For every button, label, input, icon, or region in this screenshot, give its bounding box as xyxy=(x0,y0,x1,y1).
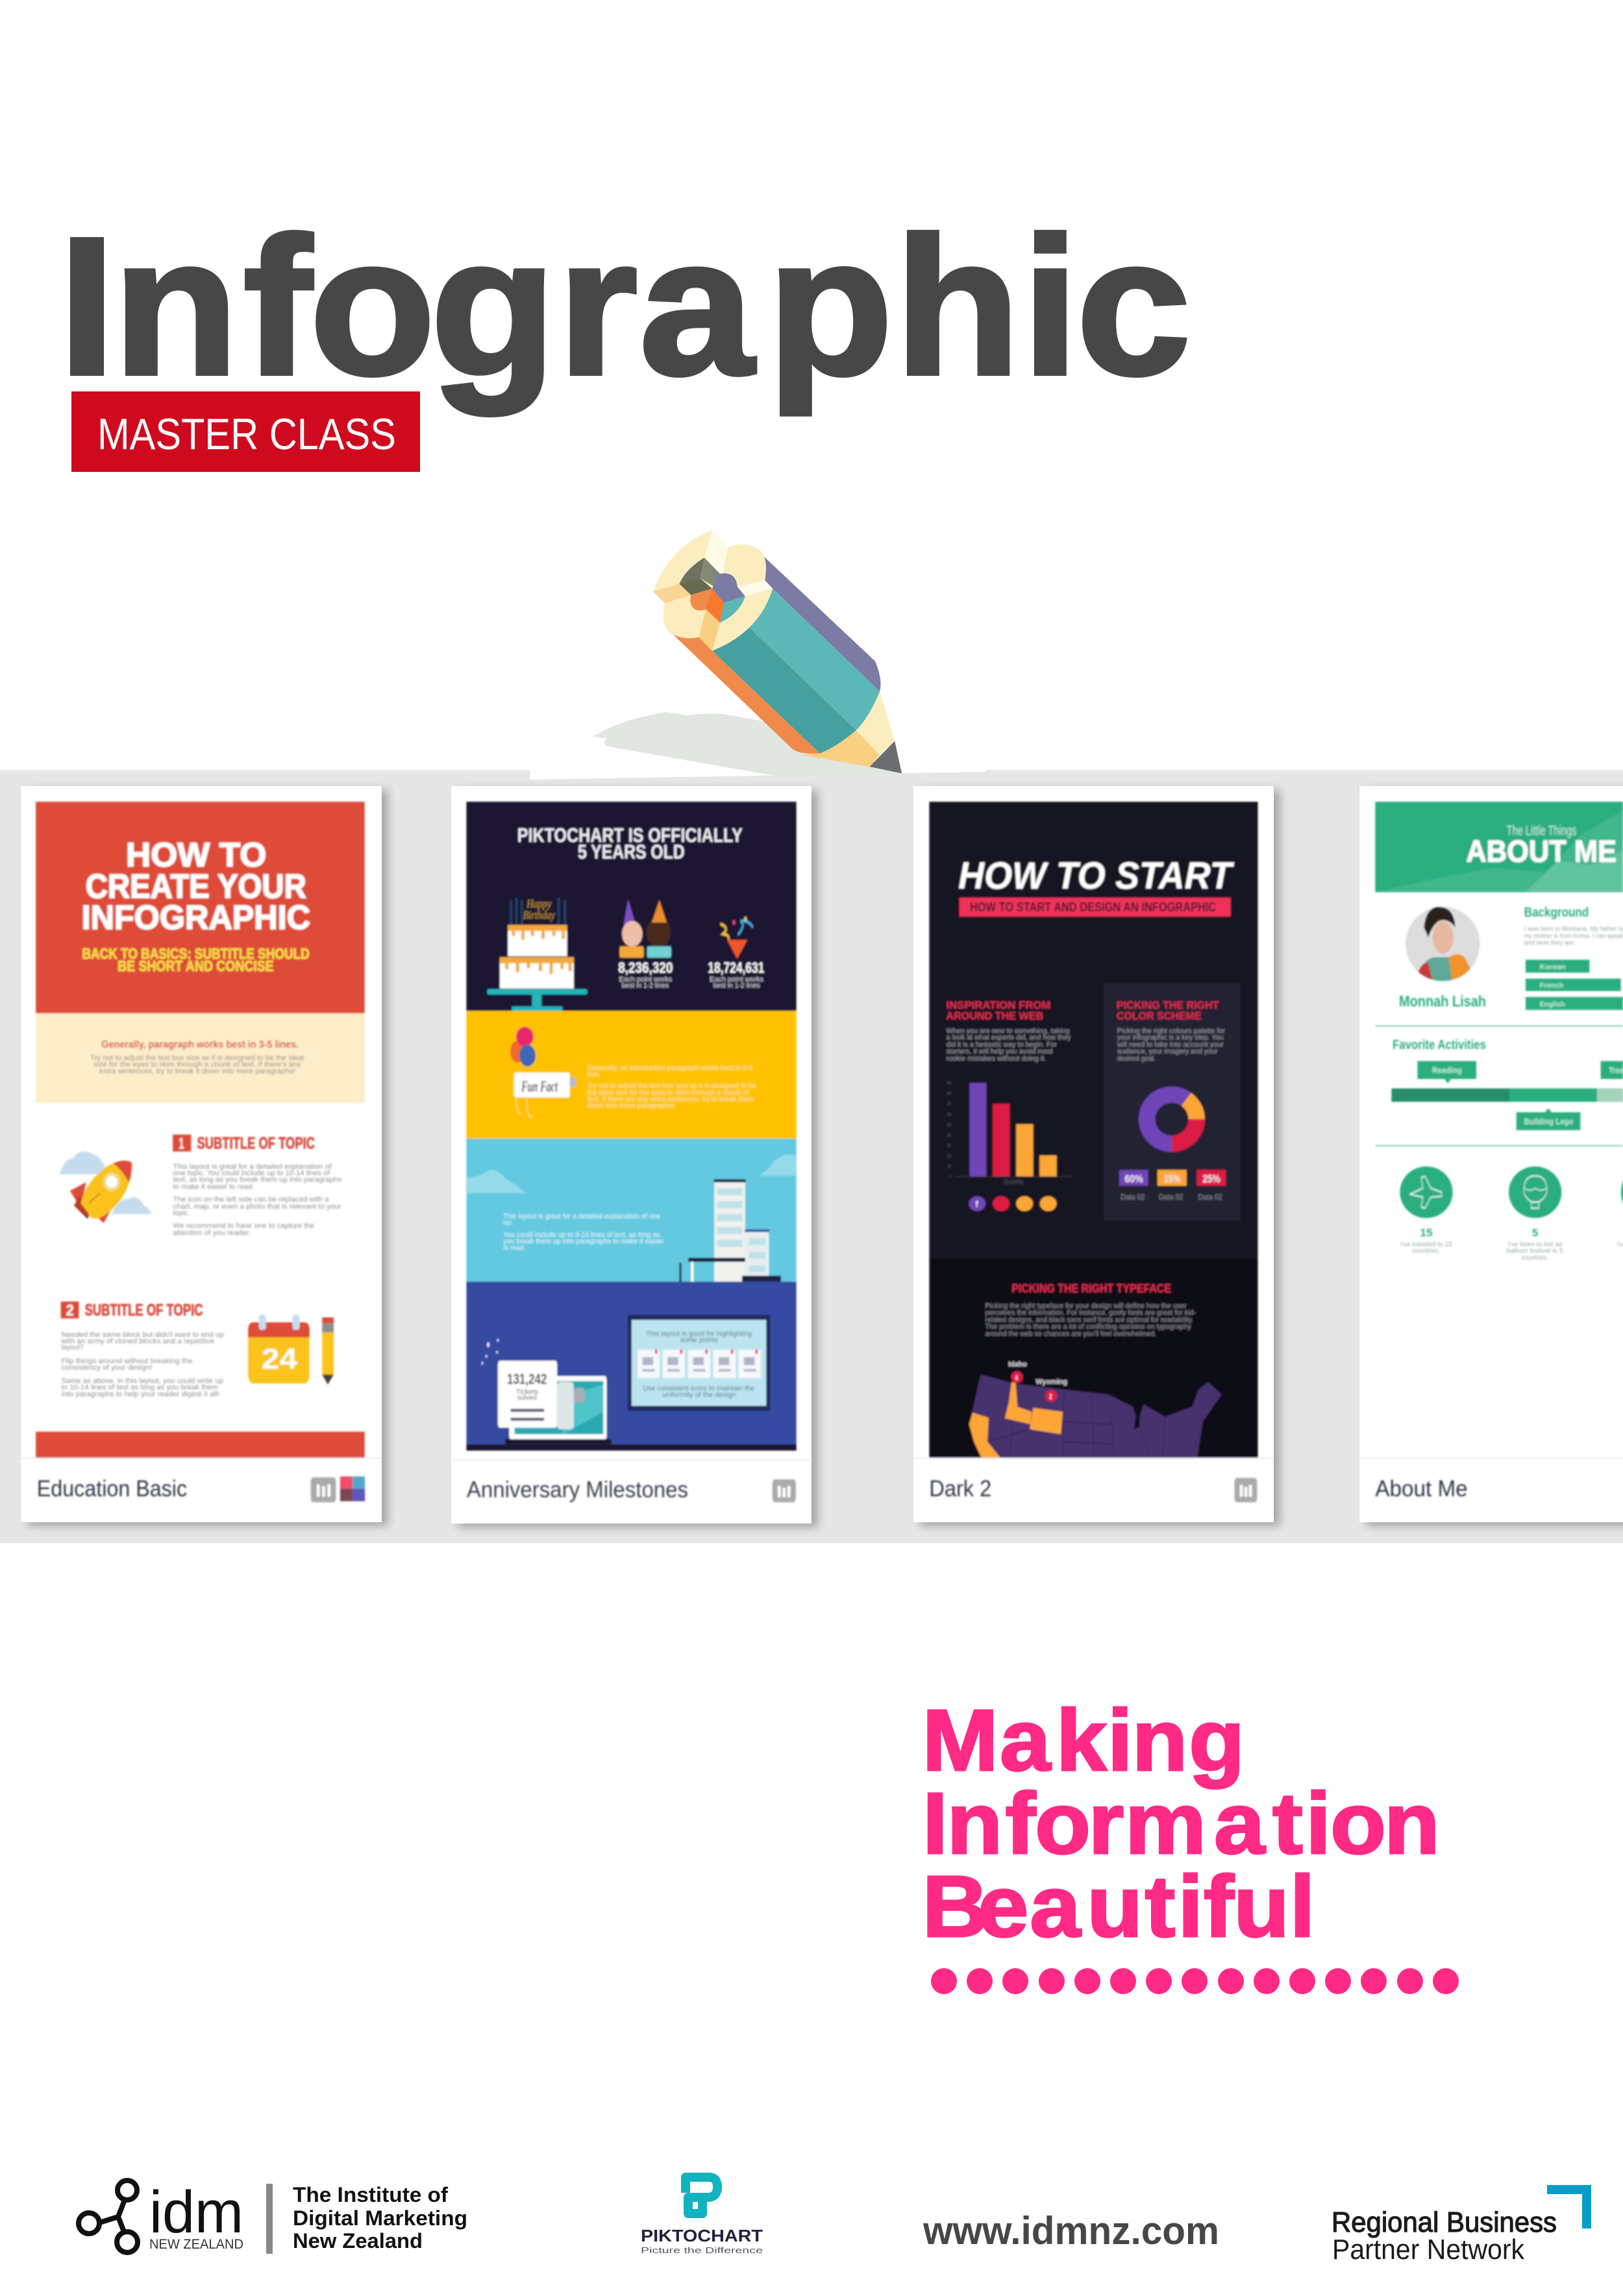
topic 1: The icon on the left side can be replaced with a xyxy=(173,1195,330,1204)
icon: chart badge xyxy=(311,1477,336,1502)
card shadows xyxy=(27,790,1623,1527)
background block: Background xyxy=(1524,906,1589,920)
icon: chart badge xyxy=(773,1479,796,1502)
topic 1: We recommend to have one to capture the xyxy=(173,1222,314,1229)
US map xyxy=(969,1375,1222,1459)
stat: party popper xyxy=(708,917,764,989)
bar chart: 200 xyxy=(947,1154,951,1159)
icon: birthday cake xyxy=(487,898,588,1011)
green header xyxy=(1375,802,1623,892)
panel: colour scheme: Data 02 xyxy=(1159,1193,1183,1202)
icon: idm nodes xyxy=(79,2180,138,2253)
topic 2: layout? xyxy=(62,1343,84,1352)
stat: people: Each point works xyxy=(619,975,673,983)
section: typeface: related designs, and black sans serif fonts are optimal for readability. xyxy=(985,1315,1193,1324)
favorite activities xyxy=(1391,1038,1623,1130)
column: inspiration: When you are new to something, taking xyxy=(947,1027,1069,1035)
panel: colour scheme xyxy=(1104,983,1241,1220)
footer divider xyxy=(1359,1457,1623,1459)
section: blue with highlights: solved xyxy=(517,1394,537,1401)
pencil illustration xyxy=(593,530,902,776)
stat: people: best in 1-2 lines xyxy=(622,981,669,989)
column: inspiration: did it is a fantastic way to begin. For xyxy=(947,1040,1057,1048)
stat: countries travelled: 15 xyxy=(1420,1226,1433,1239)
topic 2: Needed the same block but didn't want to end up xyxy=(62,1330,224,1339)
dotted line xyxy=(931,1968,1459,1994)
logo: Regional Business Partner Network xyxy=(1332,2185,1591,2265)
section: yellow fun fact: Generally, an introduction paragraph works best in 3-5 xyxy=(588,1063,753,1072)
section: navy header xyxy=(466,802,797,1011)
panel: colour scheme: 60% xyxy=(1124,1172,1143,1185)
column: inspiration: rookie mistakes without doing it. xyxy=(947,1054,1046,1062)
section: blue with highlights: 131,242 xyxy=(507,1371,547,1387)
template gallery band xyxy=(0,766,1623,1543)
map pins xyxy=(1008,1360,1067,1402)
cream intro paragraph: size for the eyes to skim through a chunk of text. If there's any xyxy=(93,1060,301,1068)
header block: BACK TO BASICS: SUBTITLE SHOULD xyxy=(82,945,310,962)
bar chart: Quantity xyxy=(1004,1178,1024,1185)
template name: Dark 2 xyxy=(929,1475,991,1501)
bar chart: 300 xyxy=(947,1144,951,1148)
section: sky with building: to read. xyxy=(503,1243,525,1252)
icon: colour swatch xyxy=(340,1476,365,1501)
topic 1 xyxy=(173,1135,342,1237)
column: inspiration xyxy=(947,999,1071,1062)
topic 2: with an army of cloned blocks and a repetitive xyxy=(60,1337,214,1345)
donut chart xyxy=(1139,1087,1205,1152)
stat: cut off at page edge: I've xyxy=(1617,1241,1623,1248)
cream intro paragraph: Try not to adjust the text box size as it is designed to be the ideal xyxy=(90,1054,304,1062)
topic 2: into paragraphs to help your reader digest it all! xyxy=(62,1390,219,1398)
section: sky with building: This layout is great for a detailed explanation of one xyxy=(503,1212,661,1220)
stat: countries travelled xyxy=(1400,1167,1453,1255)
topic 1: text, as long as you break them up into paragraphs xyxy=(173,1176,342,1183)
favorite activities: Reading xyxy=(1432,1067,1462,1076)
tagline: making information beautiful xyxy=(923,1692,1440,1955)
section: blue with highlights: Tickets xyxy=(516,1387,539,1396)
topic 2: SUBTITLE OF TOPIC xyxy=(85,1302,203,1320)
card: Anniversary Milestones xyxy=(451,786,812,1524)
header block: BE SHORT AND CONCISE xyxy=(118,957,274,974)
section: navy header: 5 YEARS OLD xyxy=(578,841,685,863)
panel: colour scheme: your infographic is a key step. You xyxy=(1117,1033,1223,1041)
favorite activities: Trav xyxy=(1609,1067,1623,1076)
template name: Anniversary Milestones xyxy=(467,1476,688,1502)
panel: colour scheme: COLOR SCHEME xyxy=(1117,1009,1202,1022)
bar chart: 900 xyxy=(947,1081,951,1086)
section: sky with building: topic. xyxy=(503,1218,514,1227)
logo: Piktochart: Picture the Difference xyxy=(641,2245,763,2255)
logo: idm New Zealand: The Institute of xyxy=(293,2183,448,2206)
section: blue with highlights: Use consistent icons to maintain the xyxy=(643,1384,754,1392)
icon: rocket xyxy=(60,1152,151,1223)
panel: colour scheme: desired goal. xyxy=(1117,1054,1156,1062)
header block: CREATE YOUR xyxy=(86,867,306,905)
topic 2 xyxy=(60,1302,224,1398)
profile name: Monnah Lisah xyxy=(1399,993,1486,1011)
portrait xyxy=(1406,907,1480,981)
column: inspiration: starters, it will help you avoid most xyxy=(947,1047,1053,1055)
green header: ABOUT ME xyxy=(1466,834,1617,869)
icon: birthday cake: Happy xyxy=(526,898,552,911)
section: typeface: Picking the right typeface for your design will define how the user xyxy=(985,1302,1187,1309)
bar chart: 600 xyxy=(947,1113,951,1117)
header block xyxy=(36,802,365,1013)
stat: party popper: 18,724,631 xyxy=(708,959,764,976)
header block: HOW TO xyxy=(126,835,266,874)
tagline: making information beautiful: Making xyxy=(923,1692,1245,1789)
logo: Regional Business Partner Network: Regional Business xyxy=(1332,2206,1557,2238)
section: yellow fun fact: down into more paragraphs! xyxy=(588,1102,675,1109)
topic 1: This layout is great for a detailed explanation of xyxy=(173,1163,332,1170)
footer divider xyxy=(451,1459,812,1461)
section: typeface: PICKING THE RIGHT TYPEFACE xyxy=(1011,1283,1171,1296)
logo: Piktochart: PIKTOCHART xyxy=(641,2226,763,2245)
section: navy header: PIKTOCHART IS OFFICIALLY xyxy=(517,825,743,847)
bar chart: 100 xyxy=(947,1165,951,1170)
icon: corner bracket xyxy=(1547,2185,1591,2228)
footer accent bar xyxy=(36,1432,365,1458)
topic 1: one topic. You could include up to 10-14 lines of xyxy=(173,1169,330,1177)
section: blue with highlights xyxy=(466,1281,797,1451)
map pins: 2 xyxy=(1050,1392,1052,1400)
stat: hot air balloon festivals: 5 xyxy=(1532,1226,1538,1239)
stat: people: 8,236,320 xyxy=(618,959,673,976)
card: Dark 2 xyxy=(913,786,1274,1522)
template name: Education Basic xyxy=(37,1475,187,1501)
section: yellow fun fact: Try not to adjust the text box size as it is designed to be xyxy=(588,1081,756,1089)
logo: Regional Business Partner Network: Partner Network xyxy=(1332,2234,1525,2265)
background block: English xyxy=(1540,1000,1565,1008)
card: Education Basic xyxy=(21,786,382,1522)
icon: Piktochart mark xyxy=(686,2177,717,2214)
tagline: making information beautiful: Information xyxy=(923,1775,1440,1872)
panel: colour scheme: will need to take into account your xyxy=(1117,1040,1224,1048)
logo: idm New Zealand: Digital Marketing xyxy=(293,2206,467,2230)
section: sky with building: You could include up to 8-10 lines of text, as long as xyxy=(503,1231,660,1239)
map pins: Idaho xyxy=(1008,1360,1027,1368)
stat: people xyxy=(618,899,673,989)
section: typeface: perceives the information. For instance, goofy fonts are great for kid- xyxy=(985,1309,1196,1316)
section: yellow fun fact: text. If there are any extra sentences, try to break them xyxy=(588,1095,754,1103)
topic 1: topic. xyxy=(173,1209,190,1216)
panel: colour scheme: 25% xyxy=(1203,1172,1220,1185)
panel: colour scheme: Data 02 xyxy=(1198,1193,1222,1202)
bar chart xyxy=(947,1081,1072,1185)
section: yellow fun fact: the ideal size for the eyes to skim through a chunk of xyxy=(588,1089,749,1096)
favorite activities: Building Lego xyxy=(1524,1117,1573,1127)
background block: my mother is from Korea. I can speak xyxy=(1524,932,1623,939)
footer divider xyxy=(913,1457,1274,1459)
stat: countries travelled: I've traveled to 15 xyxy=(1400,1241,1452,1248)
subtitle badge: master class: MASTER CLASS xyxy=(97,410,396,459)
green header: The Little Things xyxy=(1507,822,1576,839)
bar chart: 400 xyxy=(947,1133,951,1138)
stat: hot air balloon festivals xyxy=(1507,1167,1563,1261)
panel: colour scheme: audience, your imagery and your xyxy=(1117,1047,1217,1055)
topic 2: Flip things around without breaking the xyxy=(62,1357,192,1364)
bar chart: 700 xyxy=(947,1102,951,1107)
background block: I was born in Montana. My father is xyxy=(1524,925,1623,933)
map pins: 4 xyxy=(1015,1374,1018,1381)
stat: cut off at page edge xyxy=(1617,1167,1623,1248)
topic 2: to 10-14 lines of text as long as you break them xyxy=(62,1383,218,1391)
section: blue with highlights: some points xyxy=(680,1336,718,1344)
icon: birthday cake: Birthday xyxy=(523,909,555,922)
stat: party popper: best in 1-2 lines xyxy=(713,981,760,989)
poster title xyxy=(958,855,1234,917)
bar chart: 800 xyxy=(947,1092,951,1096)
social icons xyxy=(969,1196,1056,1211)
topic 1: attention of you reader. xyxy=(173,1229,251,1237)
stat: party popper: Each point works xyxy=(710,975,764,983)
logo: idm New Zealand: NEW ZEALAND xyxy=(149,2237,243,2252)
template name: About Me xyxy=(1375,1475,1468,1501)
topic 1: to make it easier to read. xyxy=(173,1182,254,1191)
topic 1: chart, map, or even a photo that is relevant to your xyxy=(173,1202,341,1210)
section: sky with building: you break them up into paragraphs to make it easier xyxy=(503,1237,664,1245)
section: sky with building xyxy=(466,1139,797,1281)
bar chart: 500 xyxy=(947,1123,951,1128)
section: yellow fun fact: Fun Fact xyxy=(521,1078,558,1095)
background block: French xyxy=(1540,981,1563,989)
icon: chart badge xyxy=(1234,1478,1257,1502)
column: inspiration: INSPIRATION FROM xyxy=(947,999,1050,1011)
icon: calendar xyxy=(248,1315,310,1383)
topic 2: consistency of your design! xyxy=(62,1363,152,1371)
section: yellow fun fact xyxy=(466,1011,797,1139)
icon: calendar: 24 xyxy=(262,1343,297,1375)
tagline: making information beautiful: Beautiful xyxy=(923,1858,1315,1955)
poster title: HOW TO START AND DESIGN AN INFOGRAPHIC xyxy=(970,901,1217,915)
column: inspiration: AROUND THE WEB xyxy=(947,1009,1043,1022)
bar chart: 0 xyxy=(950,1175,951,1180)
section: yellow fun fact: lines. xyxy=(588,1070,601,1078)
logo: idm New Zealand: New Zealand xyxy=(293,2229,423,2253)
stat: hot air balloon festivals: I've been to hot air xyxy=(1508,1241,1563,1248)
logo: idm New Zealand xyxy=(79,2179,467,2254)
panel: colour scheme: PICKING THE RIGHT xyxy=(1117,999,1219,1011)
topic 2: Same as above, in this layout, you could write up xyxy=(62,1377,223,1385)
footer divider xyxy=(21,1457,382,1459)
panel: colour scheme: 15% xyxy=(1163,1172,1180,1185)
stat: hot air balloon festivals: countries. xyxy=(1521,1254,1548,1261)
social icons: f xyxy=(976,1200,978,1209)
poster title: HOW TO START xyxy=(958,855,1234,896)
header block: INFOGRAPHIC xyxy=(82,898,310,936)
cream intro paragraph: extra sentences, try to break it down into more paragraphs! xyxy=(99,1067,295,1075)
cream intro paragraph xyxy=(36,1013,365,1103)
background block xyxy=(1524,906,1623,1010)
section: blue with highlights: uniformity of the design xyxy=(662,1390,736,1398)
background block: and here they are: xyxy=(1524,939,1576,946)
section: blue with highlights: This layout is good for highlighting xyxy=(646,1329,752,1337)
topic 1: 1 xyxy=(179,1135,184,1153)
cream intro paragraph: Generally, paragraph works best in 3-5 lines. xyxy=(101,1039,299,1050)
stat: hot air balloon festivals: balloon festival in 5 xyxy=(1507,1247,1563,1255)
favorite activities: Favorite Activities xyxy=(1393,1038,1486,1052)
map pins: Wyoming xyxy=(1036,1377,1067,1386)
dark background xyxy=(929,802,1258,1458)
section: typeface: The problem is there are a lot of conflicting opinions on typography xyxy=(985,1322,1191,1331)
panel: colour scheme: Picking the right colours palette for xyxy=(1117,1027,1225,1035)
stat: countries travelled: countries. xyxy=(1412,1247,1440,1255)
topic 2: 2 xyxy=(66,1303,74,1320)
title: Infographic xyxy=(58,197,1191,417)
background block: Korean xyxy=(1540,963,1566,971)
website url: www.idmnz.com xyxy=(923,2209,1219,2253)
topic 1: SUBTITLE OF TOPIC xyxy=(197,1135,315,1153)
column: inspiration: a look at what experts did, and how they xyxy=(947,1033,1071,1041)
panel: colour scheme: Data 02 xyxy=(1121,1193,1145,1202)
subtitle badge: master class xyxy=(71,391,420,472)
card: About Me xyxy=(1359,786,1623,1522)
logo: idm New Zealand: idm xyxy=(149,2179,243,2245)
icon: pencil xyxy=(322,1317,334,1385)
section: typeface xyxy=(985,1283,1196,1337)
logo: Piktochart xyxy=(641,2177,763,2255)
section: typeface: around the web so chances are you'll feel overwhelmed. xyxy=(985,1329,1156,1337)
